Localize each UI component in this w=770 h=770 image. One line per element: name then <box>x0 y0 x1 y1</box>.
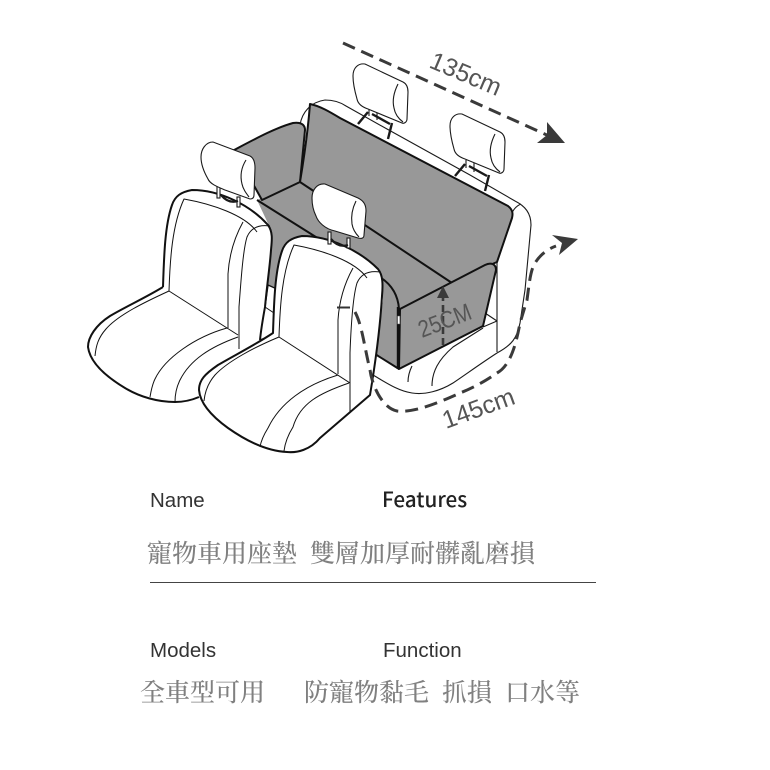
value: models and function: 抓損 <box>442 673 493 709</box>
front pocket panel <box>399 264 496 369</box>
seat fill <box>199 236 383 452</box>
arrow: 135cm width <box>343 43 565 143</box>
heading: Name: Name <box>150 489 205 512</box>
value: name and features: 雙層加厚耐髒亂磨損 <box>310 534 536 570</box>
strip between front seats <box>260 285 277 340</box>
heading: Models: Models <box>150 639 216 662</box>
seat back and cushion outline <box>199 236 383 452</box>
divider <box>150 582 596 583</box>
rear headrest left <box>353 64 408 139</box>
value: name and features: 寵物車用座墊 <box>147 534 297 570</box>
pet seat cover: grey panels <box>234 104 513 369</box>
rear bench seat outline <box>300 100 531 394</box>
seat floor panel <box>257 182 452 369</box>
front left headrest <box>201 142 255 207</box>
label: 145cm: 145cm <box>438 383 519 435</box>
main backrest panel <box>300 104 513 283</box>
front right headrest <box>312 184 366 248</box>
heading: Features: Features <box>382 483 467 513</box>
seams <box>279 245 367 337</box>
arrow: 25CM height <box>414 286 475 345</box>
seat cushion outline <box>88 287 199 402</box>
front left seat <box>88 190 272 402</box>
value: models and function <box>140 673 580 709</box>
heading: Function: Function <box>383 639 462 662</box>
seams <box>169 199 257 291</box>
value: name and features <box>147 534 536 570</box>
seat fill <box>88 190 272 402</box>
seat back outline <box>163 190 272 340</box>
value: models and function: 全車型可用 <box>140 673 265 709</box>
arrow: 145cm depth <box>337 235 578 435</box>
rear headrest right <box>450 114 505 191</box>
value: models and function: 防寵物黏毛 <box>304 673 429 709</box>
label: 135cm: 135cm <box>426 47 506 102</box>
front right seat <box>199 236 383 452</box>
value: models and function: 口水等 <box>505 673 580 709</box>
left wing panel <box>234 123 305 200</box>
floor fold line <box>257 200 399 309</box>
label: 25CM: 25CM <box>414 299 475 344</box>
